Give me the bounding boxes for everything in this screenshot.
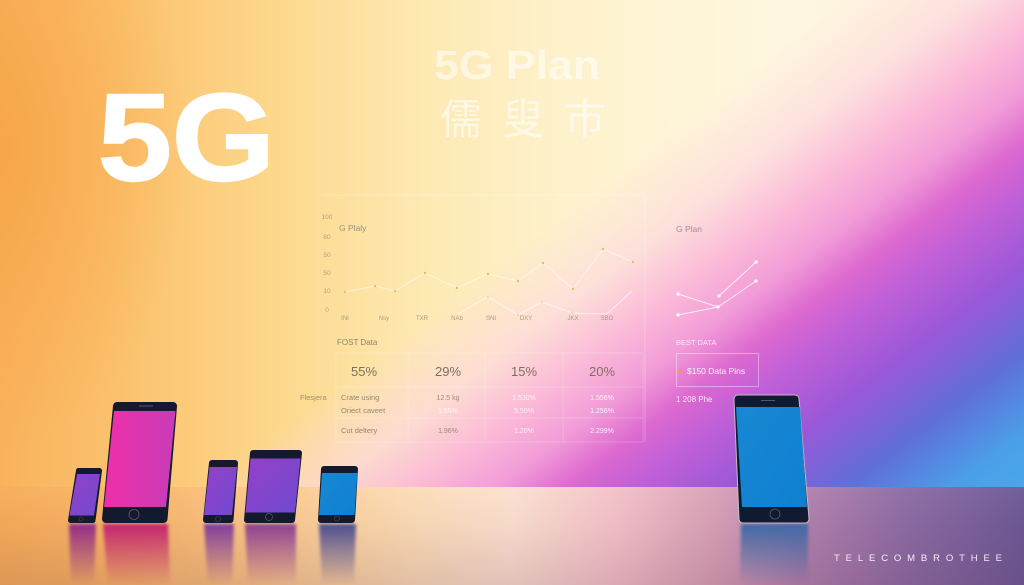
column 4 values: 2.299%: [590, 428, 614, 435]
brand wordmark: TELECOMBROTHEE: [834, 553, 1002, 564]
series 2 line: [458, 290, 633, 315]
mini chart title: G Plan: [676, 224, 702, 234]
percentages row: 29%: [435, 364, 461, 379]
column 3 values: 1.20%: [514, 428, 534, 435]
column 3 values: 5.50%: [514, 408, 534, 415]
column 4 values: 1.556%: [590, 395, 614, 402]
reflective floor: [0, 487, 1024, 585]
percentages row: 20%: [589, 364, 615, 379]
table heading: FOST Data: [337, 338, 378, 347]
heading: large 5G: 5G: [98, 69, 275, 207]
column 3 values: [512, 395, 536, 435]
x axis labels: [341, 316, 614, 322]
x axis labels: TXR: [416, 316, 429, 322]
table grid: [336, 353, 643, 442]
percentages row: [351, 364, 615, 379]
column 2 values: 12.5 kg: [437, 395, 460, 402]
phone 1: small purple: [70, 470, 100, 521]
heading: CJK subtitle: 儒叟市: [440, 96, 606, 143]
x axis labels: NAb: [451, 316, 463, 322]
y axis labels: 50: [323, 270, 331, 277]
row labels: Crate using: [341, 393, 379, 402]
series 2 points: [487, 289, 634, 316]
phone 3: purple: [204, 463, 237, 522]
column 4 values: 1.256%: [590, 408, 614, 415]
x axis labels: JKX: [567, 316, 579, 322]
callout box: [676, 354, 758, 386]
column 4 values: [590, 395, 614, 435]
row labels: [341, 393, 386, 435]
callout heading: BEST DATA: [676, 338, 716, 347]
phone 4: purple wide: [246, 453, 300, 520]
row labels: Cut deltery: [341, 426, 378, 435]
callout text: $150 Data Pins: [687, 366, 745, 376]
y axis labels: 50: [323, 252, 331, 259]
phone 6: large blue: [736, 399, 807, 519]
chart: G Plan mini line chart: [676, 224, 758, 317]
column 3 values: 1.530%: [512, 395, 536, 402]
x axis labels: INI: [341, 316, 349, 322]
column 2 values: 1.96%: [438, 428, 458, 435]
phone 2: large magenta: [104, 406, 176, 520]
panel: chart and table frame: [322, 195, 645, 442]
phone 5: small blue: [319, 469, 358, 521]
x axis labels: SBO: [601, 316, 614, 322]
x axis labels: Nsy: [379, 316, 389, 322]
series 1 line: [345, 249, 633, 292]
series 1 points: [344, 248, 634, 293]
column 2 values: [437, 395, 460, 435]
heading: 5G Plan: 5G Plan: [434, 42, 600, 88]
y axis labels: 0: [325, 307, 329, 314]
row group label: Flesjera: [300, 393, 328, 402]
y axis labels: 10: [323, 288, 331, 295]
callout: best data: [676, 338, 758, 404]
callout footnote: 1 208 Phe: [676, 395, 713, 404]
y axis labels: [322, 214, 333, 314]
icon: orange marker: [678, 369, 682, 373]
mini chart points: [676, 260, 758, 317]
y axis labels: 80: [323, 234, 331, 241]
chart: G Plaly line chart: [322, 214, 634, 322]
table: FOST Data: [300, 338, 643, 442]
x axis labels: DXY: [520, 316, 532, 322]
row labels: Oriect caveet: [341, 406, 386, 415]
percentages row: 15%: [511, 364, 537, 379]
column 2 values: 1.65%: [438, 408, 458, 415]
y axis labels: 100: [322, 214, 333, 221]
mini chart lines: [678, 262, 756, 315]
x axis labels: SNI: [486, 316, 496, 322]
phone reflections: [69, 524, 808, 585]
percentages row: 55%: [351, 364, 377, 379]
chart title: G Plaly: [339, 223, 367, 233]
